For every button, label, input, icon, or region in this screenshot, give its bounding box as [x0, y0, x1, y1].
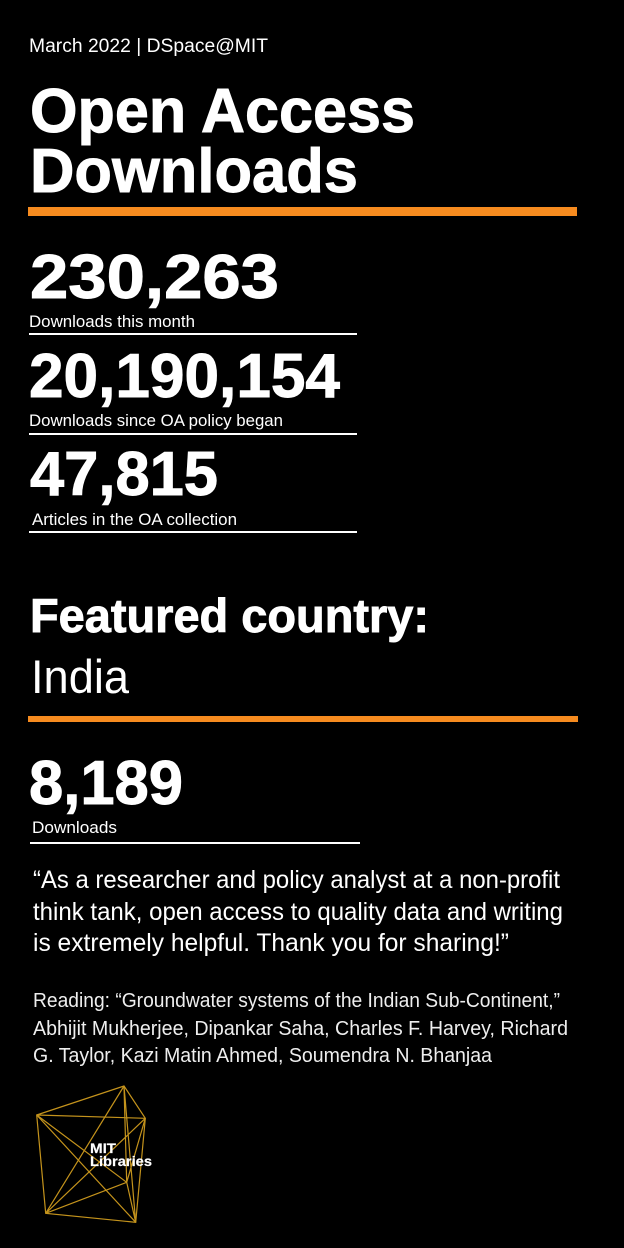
stat: downloads this month — [29, 243, 357, 335]
featured country heading: Featured country: — [30, 589, 429, 642]
reading citation: Abhijit Mukherjee, Dipankar Saha, Charles F. Harvey, Richard — [33, 1018, 568, 1040]
quote — [33, 866, 563, 957]
stat: articles in the OA collection: Articles in the OA collection — [32, 510, 237, 529]
title — [30, 77, 415, 206]
stat: downloads this month: 230,263 — [30, 243, 279, 312]
title: Open Access — [30, 77, 415, 146]
stat: India downloads: 8,189 — [29, 749, 183, 818]
icon: MIT Libraries logo: MIT — [90, 1140, 116, 1156]
reading citation: G. Taylor, Kazi Matin Ahmed, Soumendra N. Bhanjaa — [33, 1045, 493, 1067]
stat: downloads since OA policy began: Downloads since OA policy began — [29, 411, 283, 430]
stat: articles in the OA collection: 47,815 — [30, 440, 218, 509]
stat: downloads since OA policy began: 20,190,154 — [29, 342, 341, 411]
orange divider — [28, 716, 578, 722]
icon: MIT Libraries logo — [37, 1086, 152, 1222]
title: Downloads — [30, 137, 358, 206]
featured country name: India — [31, 650, 130, 703]
stat: India downloads — [29, 749, 360, 844]
quote: think tank, open access to quality data and writing — [33, 898, 563, 926]
date and source line: March 2022 | DSpace@MIT — [29, 36, 268, 57]
stat: articles in the OA collection — [29, 440, 357, 533]
stat: India downloads: Downloads — [32, 818, 117, 837]
reading citation: Reading: “Groundwater systems of the Indian Sub-Continent,” — [33, 990, 560, 1012]
icon: MIT Libraries logo: Libraries — [90, 1153, 152, 1169]
reading citation — [33, 990, 568, 1067]
quote: “As a researcher and policy analyst at a non-profit — [33, 866, 560, 894]
stat: downloads this month: Downloads this month — [29, 312, 195, 331]
quote: is extremely helpful. Thank you for sharing!” — [33, 929, 509, 957]
orange divider — [28, 207, 577, 216]
